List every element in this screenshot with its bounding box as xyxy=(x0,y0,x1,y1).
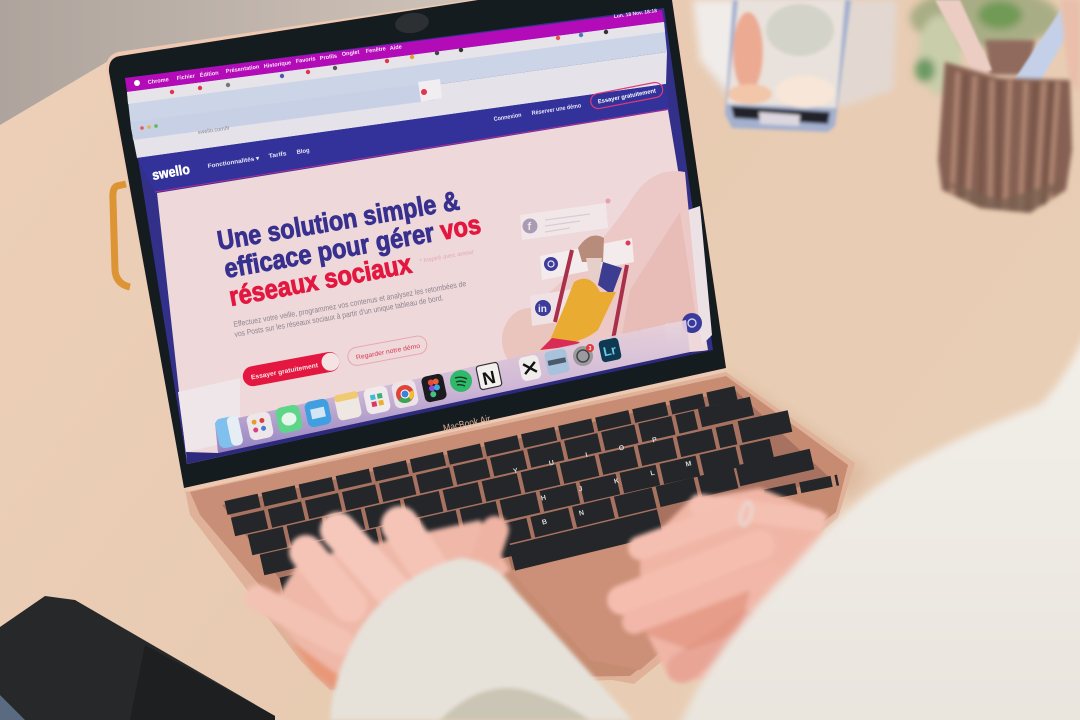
blue pen xyxy=(1014,8,1070,82)
nav link: Connexion xyxy=(493,113,522,123)
card xyxy=(530,288,582,326)
browser toolbar xyxy=(131,52,667,158)
laptop base xyxy=(185,372,855,690)
tagline small pink: * Inspiré avec amour xyxy=(419,250,475,265)
linkedin icon xyxy=(535,300,551,316)
linkedin card xyxy=(530,288,582,326)
menu bar labels xyxy=(147,8,658,86)
nav link: Fonctionnalités ▾ xyxy=(207,156,261,170)
chat bubble button xyxy=(682,313,702,333)
webcam cover xyxy=(394,11,430,35)
home key row xyxy=(262,449,772,565)
icon: Spotify xyxy=(450,370,472,392)
keyboard well xyxy=(222,390,830,610)
smartphone on stand xyxy=(725,0,851,132)
orange cable clip xyxy=(113,184,130,287)
key legend H: H xyxy=(540,495,547,503)
menu item: Favoris xyxy=(295,56,316,65)
accent dot xyxy=(638,330,642,334)
icon: Slack xyxy=(363,385,391,415)
site navigation band xyxy=(137,84,669,192)
menu item: Chrome xyxy=(147,77,169,86)
key legends xyxy=(513,437,692,527)
hero page panel xyxy=(157,110,708,464)
card accent dot xyxy=(606,198,610,204)
paragraph line 1: Effectuez votre veille, programmez vos contenus et analysez les retombées de xyxy=(233,279,467,329)
backspace key xyxy=(700,406,752,418)
apple logo xyxy=(134,80,140,86)
tab favicons xyxy=(170,30,608,94)
palm xyxy=(270,520,510,690)
person: navy top xyxy=(598,262,622,295)
headline line 2: efficace pour gérer vos xyxy=(222,209,483,284)
menu item: Présentation xyxy=(225,64,260,75)
lower finger xyxy=(682,625,745,668)
instagram card xyxy=(540,238,634,280)
primary CTA button xyxy=(241,350,341,388)
instagram glyph xyxy=(548,261,554,267)
upper finger xyxy=(700,505,815,520)
person: yellow dress xyxy=(548,279,616,345)
tab icon xyxy=(333,66,337,70)
key legend M: M xyxy=(685,460,692,469)
shadow under hand xyxy=(640,590,750,650)
macOS menu bar xyxy=(125,8,664,92)
headline line 3: réseaux sociaux xyxy=(227,249,414,312)
trash icon xyxy=(665,322,681,350)
top pale strip xyxy=(127,22,665,104)
card xyxy=(540,238,634,280)
tab icon xyxy=(459,48,463,52)
phone lower section xyxy=(130,645,275,720)
right shift key xyxy=(738,459,812,476)
menu item: Profils xyxy=(319,54,338,62)
key legend L: L xyxy=(650,469,656,477)
return key xyxy=(740,421,790,432)
close dot xyxy=(140,126,144,130)
index finger xyxy=(400,525,440,585)
browser tab strip xyxy=(127,22,667,128)
notification dot xyxy=(626,240,630,246)
person: red shoes xyxy=(540,338,580,350)
icon: Notion: N xyxy=(480,367,497,389)
ring finger xyxy=(306,552,350,605)
hero illustration xyxy=(502,171,702,372)
arrow circle xyxy=(320,351,341,372)
menu item: Onglet xyxy=(341,50,360,58)
nav link: Réserver une démo xyxy=(531,103,582,117)
icon: Launchpad xyxy=(246,411,274,441)
glass body xyxy=(938,62,1072,213)
middle finger xyxy=(622,545,760,600)
red pill xyxy=(241,350,341,388)
black bezel xyxy=(109,0,726,488)
thumb xyxy=(480,530,495,575)
screen background xyxy=(125,8,713,464)
deeper pink shape xyxy=(620,212,698,345)
middle finger xyxy=(338,530,392,590)
pill label: Essayer gratuitement xyxy=(597,88,657,106)
menu item: Fichier xyxy=(176,73,196,82)
key legend P: P xyxy=(652,437,658,444)
icon: CapCut xyxy=(518,354,542,382)
facebook icon xyxy=(522,218,538,234)
number key row xyxy=(233,420,696,527)
blue right strip lower pale part xyxy=(682,206,712,345)
menu item: Édition xyxy=(199,68,220,79)
background wall xyxy=(0,0,480,125)
trackpad xyxy=(512,512,800,670)
dock panel xyxy=(215,320,690,453)
linkedin glyph: in xyxy=(538,304,547,315)
tab icon xyxy=(306,70,310,74)
icon: Notes xyxy=(334,391,362,421)
icon: Preview photo xyxy=(544,348,570,376)
tab icon xyxy=(385,59,389,63)
shift key row xyxy=(282,478,736,588)
phone corner reflection xyxy=(0,695,25,720)
icon: Mail xyxy=(304,398,332,428)
person: neck xyxy=(586,258,602,282)
key legend Y: Y xyxy=(513,468,519,475)
icon: Chrome xyxy=(391,379,419,409)
pencil holder with pens xyxy=(935,0,1080,213)
card lines xyxy=(545,214,590,232)
icon: Notion xyxy=(476,362,502,390)
little finger xyxy=(258,598,340,642)
blue address zone xyxy=(131,84,435,140)
secondary CTA button xyxy=(346,335,428,367)
keyboard deck xyxy=(190,376,848,680)
nav pill button xyxy=(589,81,664,110)
pill outline xyxy=(589,81,664,110)
paragraph line 2: vos Posts sur les réseaux sociaux à partir d'un unique tableau de bord. xyxy=(234,293,444,339)
window traffic lights xyxy=(140,124,158,130)
right hand xyxy=(622,488,828,680)
tab icon xyxy=(280,74,284,78)
tab icon xyxy=(198,86,202,90)
chat bubble glyph xyxy=(688,319,696,327)
ring finger xyxy=(634,575,770,622)
right sleeve sweater xyxy=(678,325,1080,720)
key legend O: O xyxy=(618,444,626,453)
nav link: Tarifs xyxy=(268,151,288,160)
screen xyxy=(125,8,713,464)
lower blob xyxy=(502,308,558,372)
dock icons xyxy=(214,337,622,449)
keyboard keys xyxy=(226,393,838,588)
key legend B: B xyxy=(541,519,548,527)
nav link: Blog xyxy=(296,148,310,156)
active tab favicon xyxy=(421,89,427,95)
shadow of laptop on desk xyxy=(720,370,870,500)
icon: Finder xyxy=(214,415,244,449)
magenta nav underline xyxy=(155,109,669,192)
function key row xyxy=(226,393,736,508)
wrist shadow xyxy=(290,640,345,690)
white plant pot behind phone xyxy=(693,0,897,107)
icon: Lightroom xyxy=(598,337,622,363)
rear glass xyxy=(985,40,1035,75)
tab icon xyxy=(579,33,583,37)
facebook glyph: f xyxy=(528,221,532,233)
tab icon xyxy=(410,55,414,59)
nav links xyxy=(207,81,664,170)
icon: System Settings xyxy=(573,344,594,366)
phone body xyxy=(0,596,275,720)
address bar url: swello.com/fr xyxy=(197,126,230,136)
dark phone on desk xyxy=(0,596,275,720)
facebook card xyxy=(520,203,608,240)
tab icon xyxy=(226,83,230,87)
pink background shape xyxy=(505,171,700,355)
swello logo: swello xyxy=(151,161,191,183)
pink pen xyxy=(935,0,992,74)
key legend U: U xyxy=(548,460,555,468)
sleeve darker fold xyxy=(440,688,590,720)
tab icon xyxy=(604,30,608,34)
skin at right edge xyxy=(1060,0,1080,95)
card xyxy=(520,203,608,240)
tab icon xyxy=(556,36,560,40)
instagram icon xyxy=(544,257,558,271)
key legend N: N xyxy=(578,510,585,518)
key legend J: J xyxy=(578,486,583,493)
person: dark red chair strips xyxy=(555,250,627,345)
key legend I: I xyxy=(585,452,588,459)
left sleeve xyxy=(330,558,632,720)
minimise dot xyxy=(147,125,151,129)
silver ring xyxy=(738,501,754,527)
laptop lid xyxy=(106,0,727,492)
menu bar strip xyxy=(125,10,664,92)
menu item: Fenêtre xyxy=(365,46,386,55)
icon: Lightroom: Lr xyxy=(602,342,618,359)
button label: Essayer gratuitement xyxy=(251,362,319,381)
left hand xyxy=(258,520,510,690)
active tab xyxy=(418,79,442,102)
index finger xyxy=(640,510,745,548)
hero headline xyxy=(215,185,483,312)
hero paragraph xyxy=(233,279,467,339)
headline line 1: Une solution simple & xyxy=(215,185,462,256)
menu clock: Lun. 18 Nov. 18:18 xyxy=(613,8,658,20)
tab icon xyxy=(435,51,439,55)
pale lower left strip xyxy=(178,378,240,452)
menu item: Historique xyxy=(263,60,292,70)
space bar xyxy=(512,522,660,558)
button label: Regarder notre démo xyxy=(356,343,421,361)
blurred plant xyxy=(910,0,1060,95)
zoom dot xyxy=(154,124,158,128)
person: hair xyxy=(578,236,604,262)
outline pill xyxy=(346,335,428,367)
base outer shell xyxy=(185,372,855,690)
tab icon xyxy=(170,90,174,94)
space bar row xyxy=(470,545,510,556)
menu item: Aide xyxy=(389,44,402,52)
icon: System Settings: 3 xyxy=(589,346,592,352)
hand back xyxy=(640,488,828,680)
AZERTY key row xyxy=(250,434,735,545)
key legend K: K xyxy=(613,478,620,486)
lid rim highlight xyxy=(106,0,727,492)
icon: Figma xyxy=(421,373,447,403)
dark screen bottom xyxy=(186,350,713,464)
hinge strip text: MacBook Air xyxy=(442,413,492,435)
icon: Messages xyxy=(275,404,303,434)
arrow keys xyxy=(765,480,838,495)
